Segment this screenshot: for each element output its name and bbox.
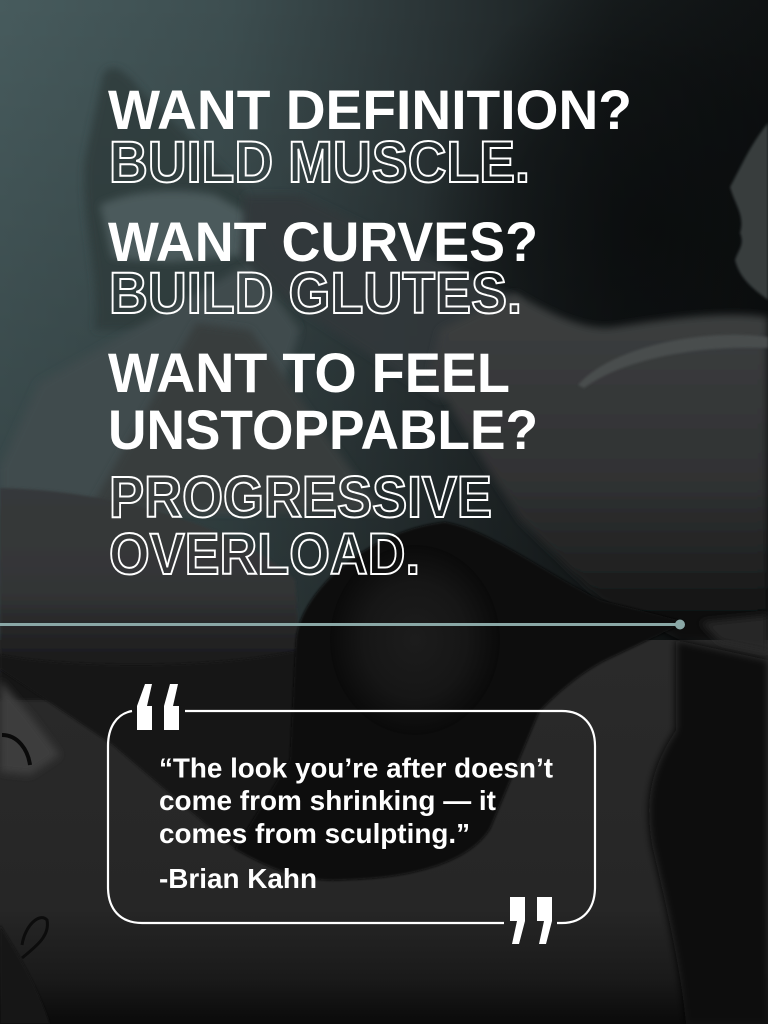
quote text: come from shrinking — it: [159, 785, 496, 816]
raised leg silhouette: [84, 68, 300, 330]
forearm: [240, 195, 540, 400]
hands gripping: [100, 191, 250, 262]
shorts: [235, 522, 686, 880]
box outline: [108, 711, 595, 923]
outline text: overload: OVERLOAD.: [109, 522, 420, 587]
quote box: [108, 684, 595, 944]
heading: want definition: WANT DEFINITION?: [108, 78, 632, 141]
lower-left shoe: [0, 925, 50, 1024]
quote attribution: -Brian Kahn: [159, 863, 317, 894]
dark underside of thigh: [0, 650, 300, 849]
upper arm and torso: [430, 293, 768, 640]
outline text: progressive: PROGRESSIVE: [109, 465, 492, 530]
quote text: “The look you’re after doesn’t: [159, 752, 553, 784]
lit floor patch left: [0, 680, 60, 775]
shorts highlight: [330, 545, 500, 735]
calf triangle: [0, 263, 300, 512]
outline text: build muscle: BUILD MUSCLE.: [109, 130, 530, 195]
knee and thigh panel: [88, 323, 382, 512]
face profile: [730, 123, 768, 300]
heading: unstoppable: UNSTOPPABLE?: [108, 398, 538, 461]
dark area behind figure, right side: [420, 0, 768, 490]
heading: want curves: WANT CURVES?: [108, 210, 538, 273]
divider with end dot: [0, 620, 685, 630]
quote text: [159, 752, 553, 849]
dark object right: [649, 640, 768, 1024]
shoe lace: [2, 735, 30, 765]
lower thigh lit area: [0, 488, 300, 700]
outline text: build glutes: BUILD GLUTES.: [109, 261, 522, 326]
sports bra strap arc: [578, 335, 768, 388]
lit band right: [700, 615, 768, 652]
quote text: comes from sculpting.”: [159, 818, 470, 849]
floor: [0, 640, 768, 1024]
heading: want to feel: WANT TO FEEL: [108, 341, 510, 404]
icon: closing quote mark: [510, 897, 552, 944]
icon: opening quote mark: [137, 684, 179, 730]
